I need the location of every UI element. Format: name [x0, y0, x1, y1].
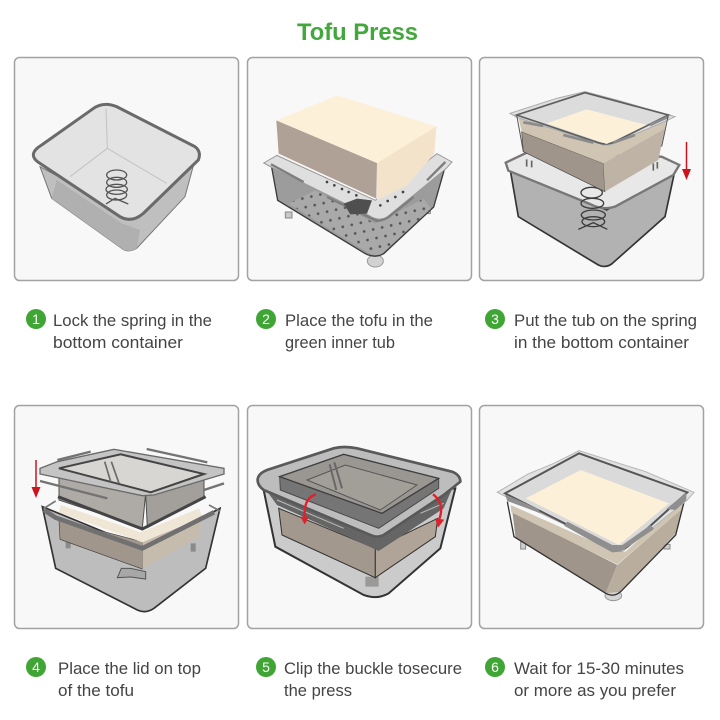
badge: 2	[256, 309, 276, 329]
caption: step 2: Place the tofu in the	[285, 312, 433, 330]
icon: lid	[40, 449, 224, 529]
badge: 1	[26, 309, 46, 329]
panel: step 3 image	[480, 58, 704, 280]
badge: 6	[485, 657, 505, 677]
caption: step 2: green inner tub	[285, 334, 395, 352]
caption: step 4: Place the lid on top	[58, 660, 201, 678]
icon: tofu block	[276, 95, 436, 200]
badge: 5	[256, 657, 276, 677]
arrow: down	[32, 460, 40, 498]
caption: step 6: Wait for 15-30 minutes	[514, 660, 684, 678]
caption: step 4: of the tofu	[58, 682, 134, 700]
icon: bottom container with spring	[506, 153, 679, 266]
caption: step 1: Lock the spring in the	[53, 312, 212, 330]
badge: 2: 2	[262, 311, 270, 327]
arrow: down	[682, 142, 691, 180]
caption: step 3: in the bottom container	[514, 334, 690, 352]
caption: step 2	[256, 309, 433, 352]
caption: step 1: bottom container	[53, 334, 184, 352]
badge: 3	[485, 309, 505, 329]
panel: step 5 image	[248, 406, 472, 628]
caption: step 6	[485, 657, 684, 700]
caption: step 6: or more as you prefer	[514, 682, 677, 700]
caption: step 5: the press	[284, 682, 352, 700]
icon: empty bottom container with spring	[33, 104, 199, 251]
caption: step 5	[256, 657, 462, 700]
caption: step 4	[26, 657, 201, 700]
caption: step 3: Put the tub on the spring	[514, 312, 697, 330]
panel: step 2 image	[248, 58, 472, 280]
badge: 3: 3	[491, 311, 499, 327]
badge: 6: 6	[491, 659, 499, 675]
caption: step 1	[26, 309, 212, 352]
arrow: left curved	[300, 494, 316, 524]
caption: step 5: Clip the buckle tosecure	[284, 660, 462, 678]
badge: 4	[26, 657, 46, 677]
icon: bottom container	[42, 501, 220, 612]
panel: step 1 image	[14, 58, 238, 280]
icon: inner tub with perforated base	[264, 154, 452, 267]
panel: step 6 image	[480, 406, 704, 628]
icon: finished tofu press	[497, 451, 694, 601]
icon: assembled press with buckles	[258, 447, 460, 597]
badge: 4: 4	[32, 659, 40, 675]
badge: 5: 5	[262, 659, 270, 675]
caption: step 3	[485, 309, 697, 352]
panel: step 4 image	[14, 406, 238, 628]
badge: 1: 1	[32, 311, 40, 327]
arrow: right curved	[433, 494, 444, 528]
icon: inner tub with tofu	[510, 92, 675, 192]
title: Tofu Press	[297, 19, 418, 46]
